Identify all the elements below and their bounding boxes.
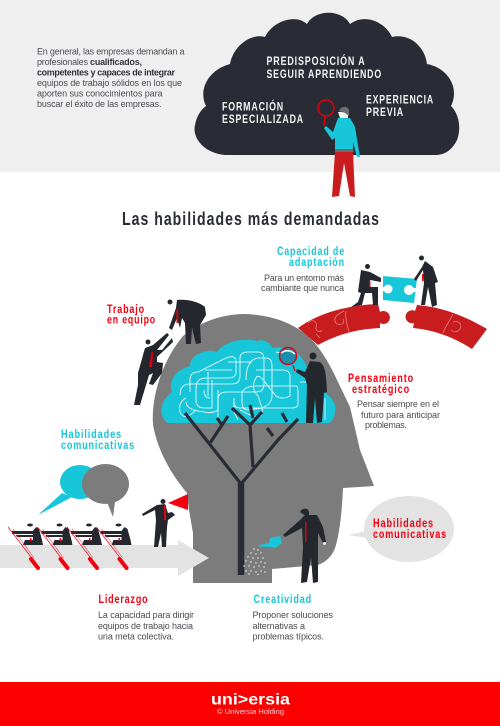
cloud labels: ESPECIALIZADA — [222, 114, 304, 126]
panel: creatividad text: Creatividad — [254, 594, 312, 606]
figure: man with watering can — [259, 509, 326, 583]
rower 4 — [96, 524, 132, 568]
panel: liderazgo text: una meta colectiva. — [98, 632, 174, 642]
panel: capacidad de adaptacion text: Para un entorno más — [264, 273, 344, 283]
panel: pensamiento estrategico text: Pensar siempre en el — [357, 399, 439, 409]
speech bubble: habilidades comunicativas right — [348, 496, 454, 562]
figure: kneeling man on puzzle — [351, 264, 381, 307]
puzzle bridge right piece — [406, 305, 487, 349]
figure: standing man on puzzle — [414, 256, 438, 307]
cloud labels: FORMACIÓN — [222, 100, 284, 114]
brain cloud — [161, 340, 335, 423]
panel: creatividad text: alternativas a — [252, 621, 305, 631]
tree — [185, 405, 298, 575]
cloud labels: SEGUIR APRENDIENDO — [266, 69, 382, 81]
figure: man reaching down — [168, 300, 206, 344]
magnifier on brain — [280, 348, 296, 371]
rower 2 — [38, 524, 72, 568]
intro text block: En general, las empresas demandan a — [37, 46, 184, 56]
panel: habilidades comunicativas left label: comunicativas — [61, 440, 135, 452]
footer copyright: © Universia Holding — [217, 707, 284, 716]
rower 3 — [67, 524, 102, 568]
panel: liderazgo text: Liderazgo — [98, 594, 148, 606]
panel: capacidad de adaptacion text: adaptación — [289, 257, 345, 269]
panel: liderazgo text: La capacidad para dirigir — [98, 610, 194, 620]
panel: capacidad de adaptacion text — [261, 246, 345, 293]
figure: man with magnifying glass — [318, 100, 360, 197]
cloud labels — [222, 55, 434, 126]
dark thought cloud — [195, 13, 459, 155]
water droplets — [243, 548, 266, 575]
title: Las habilidades más demandadas — [122, 209, 380, 229]
intro text block: aporten sus conocimientos para — [37, 88, 162, 98]
panel: pensamiento estrategico text: problemas. — [365, 420, 407, 430]
figure: leader with megaphone — [142, 494, 188, 547]
puzzle teal piece — [382, 276, 418, 303]
top band background — [0, 0, 500, 172]
figure: man examining brain — [296, 352, 327, 423]
panel: creatividad text: Proponer soluciones — [252, 610, 334, 620]
panel: creatividad text — [252, 594, 334, 642]
puzzle bridge left piece — [298, 304, 390, 345]
cloud labels: PREVIA — [366, 107, 404, 119]
speech bubble: habilidades comunicativas right: Habilidades — [373, 518, 434, 530]
grey head silhouette — [153, 314, 374, 583]
brain tangled white lines — [180, 352, 325, 422]
panel: creatividad text: problemas típicos. — [252, 632, 324, 642]
logo: universia: uni>ersia — [211, 692, 290, 708]
intro text block: profesionales cualificados, — [37, 57, 142, 67]
intro text block — [37, 46, 184, 109]
panel: capacidad de adaptacion text: Capacidad de — [277, 246, 345, 258]
cloud labels: EXPERIENCIA — [366, 94, 434, 106]
panel: habilidades comunicativas left label: Habilidades — [61, 429, 122, 441]
cloud labels: PREDISPOSICIÓN A — [266, 55, 366, 68]
rowers — [8, 524, 132, 568]
panel: trabajo en equipo label: Trabajo — [107, 304, 145, 316]
panel: pensamiento estrategico text: futuro para anticipar — [361, 410, 440, 420]
intro text block: buscar el éxito de las empresas. — [37, 99, 162, 109]
figure: climbing man — [134, 333, 173, 405]
panel: trabajo en equipo label — [107, 304, 156, 326]
grey arrow — [0, 540, 209, 576]
speech bubble grey — [82, 464, 129, 517]
rower 1 — [8, 524, 43, 568]
panel: habilidades comunicativas left label — [61, 429, 135, 452]
panel: liderazgo text — [98, 594, 194, 642]
panel: pensamiento estrategico text: Pensamiento — [348, 373, 414, 385]
intro text block: competentes y capaces de integrar — [37, 68, 175, 78]
panel: liderazgo text: equipos de trabajo hacia — [98, 621, 193, 631]
panel: capacidad de adaptacion text: cambiante que nunca — [261, 283, 344, 293]
speech bubble teal — [38, 465, 100, 515]
intro text block: equipos de trabajo sólidos en los que — [37, 78, 182, 88]
panel: pensamiento estrategico text: estratégico — [352, 384, 410, 396]
panel: pensamiento estrategico text — [348, 373, 440, 430]
footer band — [0, 682, 500, 726]
speech bubble: habilidades comunicativas right: comunicativas — [373, 529, 447, 541]
panel: trabajo en equipo label: en equipo — [107, 314, 156, 326]
